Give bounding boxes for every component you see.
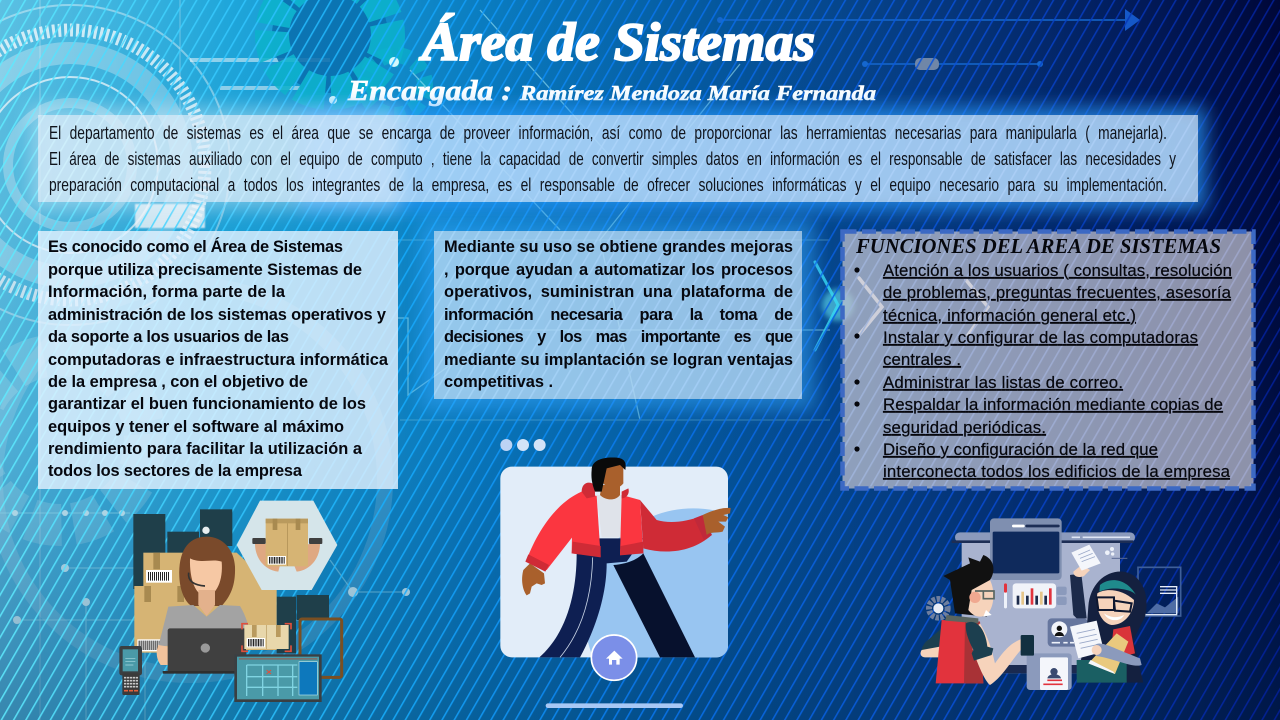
background: circuit nodes: [12, 9, 1140, 624]
panel: Área de Sistemas description: equipos y tener el software al máximo: [48, 418, 344, 436]
panel: functions list: [842, 232, 1254, 488]
scanned box: [242, 624, 291, 651]
home bar: [546, 703, 683, 708]
panel: Área de Sistemas description: Información, forma parte de la: [48, 283, 286, 301]
cardboard boxes: [134, 553, 277, 653]
dark storage blocks: [133, 509, 329, 653]
screen card: [500, 466, 728, 658]
functions bullet items: técnica, información general etc.): [883, 306, 1136, 325]
paper raised: [1070, 545, 1101, 618]
agent with headset: [157, 537, 250, 674]
functions bullet items: centrales .: [883, 350, 961, 369]
panel: Área de Sistemas description: computadoras e infraestructura informática: [48, 351, 389, 369]
functions bullet items: Respaldar la información mediante copias de: [883, 395, 1223, 414]
background: circuit lines: [0, 10, 830, 720]
background: glowing chevrons: [815, 262, 988, 350]
panel: Área de Sistemas description: da soporte a los usuarios de las: [48, 328, 289, 346]
gear icon: [929, 599, 948, 618]
panel: benefits: decisiones y los mas importante es que: [444, 328, 793, 346]
panel: Área de Sistemas description: garantizar el buen funcionamiento de los: [48, 395, 366, 413]
subtitle: person in charge: [347, 75, 876, 107]
hexagon with box in hands: [237, 501, 337, 590]
illustration: two office workers: [921, 518, 1181, 690]
functions bullet items: seguridad periódicas.: [883, 418, 1046, 437]
dashboard wall: [952, 518, 1135, 673]
background: upper right data lines: [720, 20, 1125, 64]
panel: Área de Sistemas description: porque utiliza precisamente Sistemas de: [48, 261, 362, 279]
panel: Área de Sistemas description: de la empresa , con el objetivo de: [48, 373, 308, 391]
background: technology rings: [0, 0, 385, 720]
functions bullet items: Diseño y configuración de la red que: [883, 440, 1158, 459]
functions bullet items: [854, 261, 1232, 481]
panel: benefits: [422, 220, 814, 410]
title: Área de Sistemas: [419, 12, 815, 72]
functions bullet items: Instalar y configurar de las computadoras: [883, 328, 1198, 347]
profile card: [1048, 618, 1088, 647]
bar chart: [1004, 583, 1067, 608]
functions bullet items: de problemas, preguntas frecuentes, asesoría: [883, 283, 1232, 302]
panel: Área de Sistemas description: administración de los sistemas operativos y: [48, 306, 387, 324]
man with coffee: [921, 555, 1034, 685]
panel: Área de Sistemas description: todos los sectores de la empresa: [48, 462, 303, 480]
subtitle: person in charge: Ramírez Mendoza María Fernanda: [519, 81, 876, 105]
background: gears: [0, 0, 425, 525]
functions bullet items: interconecta todos los edificios de la empresa: [883, 462, 1231, 481]
illustration: mobile screen with character: [500, 439, 731, 708]
certificate card: [1027, 653, 1072, 690]
woman with hijab: [1070, 572, 1147, 683]
functions bullet items: Atención a los usuarios ( consultas, resolución: [883, 261, 1232, 280]
page dots: [500, 439, 546, 451]
panel: benefits: mediante su implantación se logran ventajas: [444, 351, 793, 369]
panel: benefits: operativos, suministran una plataforma de: [444, 283, 793, 301]
functions heading: FUNCIONES DEL AREA DE SISTEMAS: [855, 234, 1221, 258]
tablet with grid: [234, 654, 322, 702]
panel: Área de Sistemas description: Es conocido como el Área de Sistemas: [48, 237, 343, 256]
picture frame: [1138, 567, 1181, 616]
panel: benefits: competitivas .: [444, 373, 553, 391]
panel: benefits: Mediante su uso se obtiene grandes mejoras: [444, 238, 793, 256]
functions bullet items: Administrar las listas de correo.: [883, 373, 1123, 392]
handheld scanner: [119, 646, 142, 695]
illustration: warehouse operator: [119, 501, 342, 702]
character: [522, 457, 731, 657]
panel: introduction: [30, 107, 1206, 210]
panel: benefits: información necesaria para la toma de: [444, 306, 793, 324]
panel: benefits: , porque ayudan a automatizar los procesos: [444, 261, 793, 279]
subtitle: person in charge: Encargada :: [347, 75, 512, 107]
panel: Área de Sistemas description: rendimiento para facilitar la utilización a: [48, 440, 363, 458]
clipboard: [300, 619, 342, 677]
home button: [591, 635, 637, 680]
panel: Área de Sistemas description: [38, 231, 398, 489]
